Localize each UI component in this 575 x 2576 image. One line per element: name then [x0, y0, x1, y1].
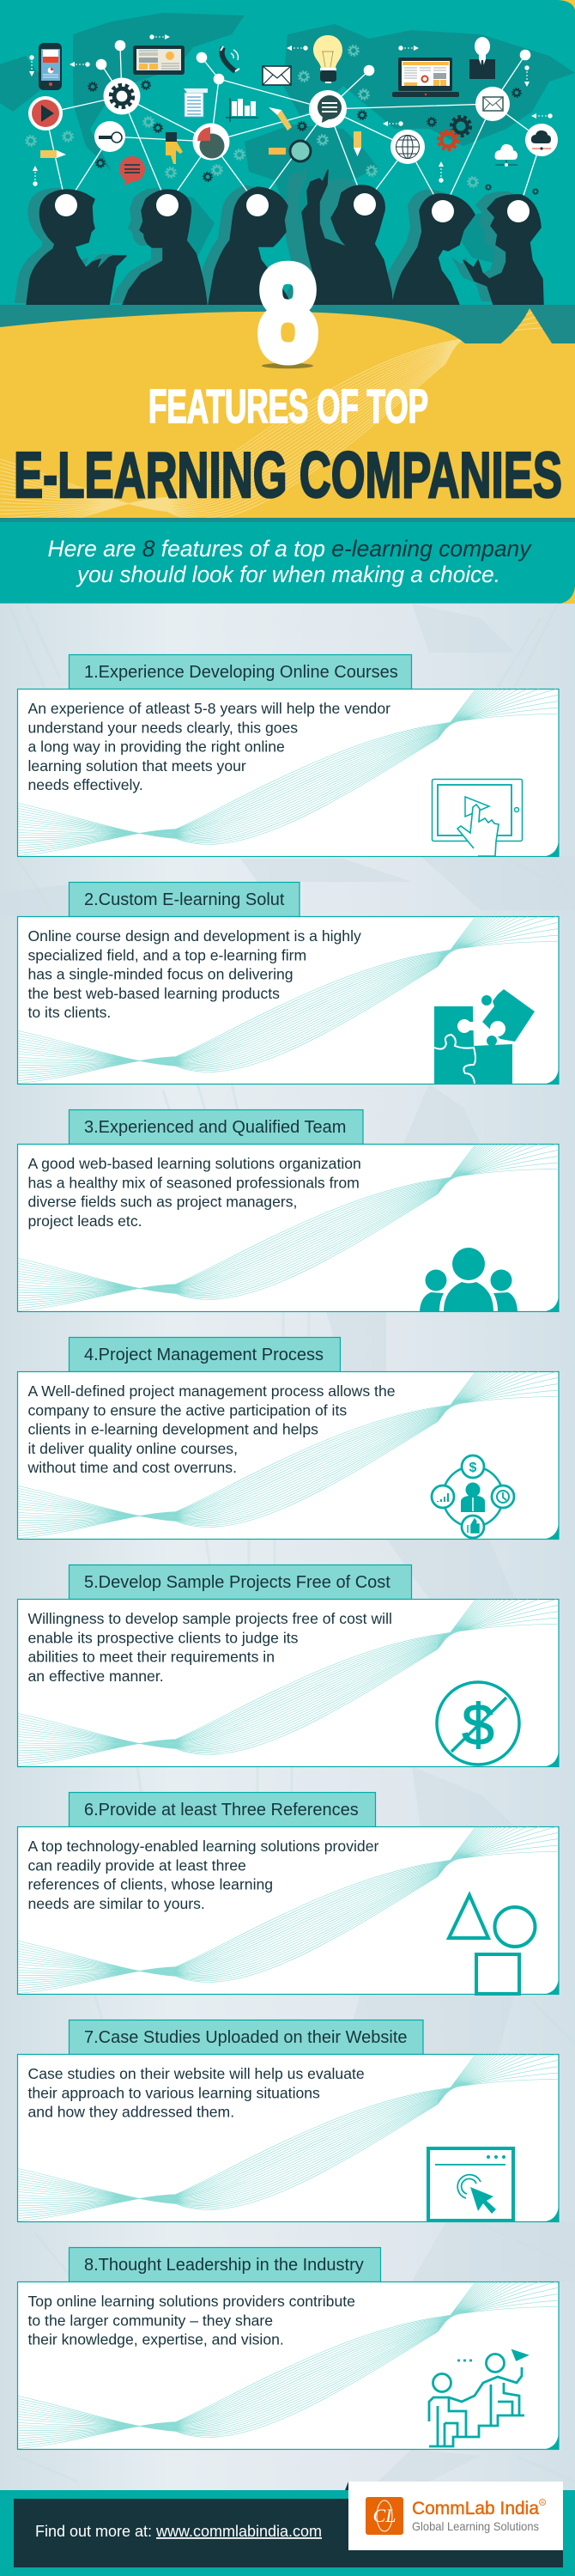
- icon: project management cycle: [432, 1455, 514, 1538]
- text: feature 7 body: their approach to various learning situations: [27, 2084, 320, 2101]
- text: feature 8 body: Top online learning solutions providers contribute: [27, 2293, 355, 2310]
- text: feature 3 body: A good web-based learning solutions organization: [27, 1155, 361, 1172]
- icon: no cost: [437, 1682, 519, 1765]
- panel: feature 4: [17, 1336, 560, 1540]
- text: feature 4 body: [27, 1382, 396, 1476]
- text: feature 7 body: and how they addressed them.: [27, 2104, 234, 2121]
- text: feature 6 body: can readily provide at least three: [27, 1856, 246, 1874]
- heading: features of top: FEATURES OF TOP: [148, 380, 428, 433]
- text: feature 5 body: Willingness to develop sample projects free of cost will: [27, 1610, 392, 1627]
- icon: document: [184, 88, 208, 117]
- text: feature 1 body: [27, 700, 390, 793]
- text: feature 3 body: has a healthy mix of seasoned professionals from: [27, 1174, 360, 1191]
- heading: feature 2: 2.Custom E-learning Solut: [84, 890, 285, 909]
- icon: shapes: [449, 1895, 536, 1994]
- icon: pencil: [269, 107, 292, 131]
- text: feature 1 body: needs effectively.: [27, 776, 143, 793]
- dashed arrows: [32, 37, 550, 184]
- people shadows: [15, 163, 531, 303]
- text: intro line 2: you should look for when making a choice.: [76, 562, 500, 587]
- heading: feature 4: [69, 1338, 340, 1372]
- heading: feature 6: [69, 1793, 376, 1827]
- panel: yellow title band: [0, 305, 575, 522]
- icon: bar chart: [226, 98, 258, 122]
- icon: project management cycle: $: [469, 1461, 477, 1475]
- text: feature 1 body: understand your needs clearly, this goes: [27, 719, 298, 736]
- world map backdrop: [0, 13, 575, 266]
- icon: laptop: [392, 58, 459, 97]
- text: feature 4 body: it deliver quality online courses,: [27, 1440, 238, 1457]
- heading: feature 1: [69, 654, 412, 689]
- icon: no cost: $: [462, 1692, 494, 1758]
- heading: feature 7: [69, 2020, 423, 2054]
- small gears: [26, 46, 478, 187]
- heading: feature 5: [69, 1564, 412, 1599]
- text: feature 1 body: An experience of atleast 5-8 years will help the vendor: [27, 700, 390, 717]
- text: feature 3 body: [27, 1155, 361, 1230]
- heading: feature 8: 8.Thought Leadership in the Industry: [84, 2256, 364, 2275]
- heading: feature 5: 5.Develop Sample Projects Free of Cost: [84, 1573, 390, 1592]
- text: feature 2 body: has a single-minded focus on delivering: [27, 966, 294, 983]
- text: feature 1 body: learning solution that meets your: [27, 757, 246, 775]
- node: globe: [390, 130, 425, 164]
- heading: feature 2: [69, 883, 300, 917]
- text: feature 2 body: the best web-based learning products: [27, 985, 280, 1002]
- silhouettes of people: [27, 170, 543, 305]
- icon: red chat bubble: [119, 156, 145, 185]
- text: feature 8 body: [27, 2293, 355, 2348]
- heading: feature 7: 7.Case Studies Uploaded on their Website: [84, 2028, 408, 2047]
- logo: CommLab India: Global Learning Solutions: [412, 2519, 539, 2533]
- icon: puzzle: [434, 989, 535, 1084]
- icon: pointing hand: [166, 132, 183, 164]
- icon: businessman: [469, 37, 495, 79]
- panel: intro banner: [0, 522, 575, 604]
- panel: feature 6: [17, 1791, 560, 1996]
- text: feature 2 body: [27, 927, 361, 1021]
- panel: feature 5: [17, 1564, 560, 1767]
- heading: big 8: 8: [258, 239, 318, 387]
- text: feature 6 body: references of clients, whose learning: [27, 1876, 273, 1893]
- text: find out more: Find out more at: www.commlabindia.com: [35, 2523, 322, 2540]
- heading: feature 1: 1.Experience Developing Online Courses: [84, 663, 398, 682]
- text: feature 4 body: clients in e-learning development and helps: [27, 1421, 318, 1438]
- icon: web click: [428, 2148, 513, 2221]
- node: cloud: [525, 124, 558, 156]
- text: feature 4 body: A Well-defined project management process allows the: [27, 1382, 396, 1400]
- head and small nodes: [55, 40, 530, 222]
- panel: header illustration: [0, 0, 575, 309]
- icon: tablet: [133, 46, 185, 75]
- icon: pencil left: [40, 150, 66, 158]
- icon: team: [420, 1248, 518, 1311]
- icon: leadership climb: [429, 2351, 526, 2446]
- node: pie chart: [192, 124, 230, 160]
- text: feature 1 body: a long way in providing the right online: [27, 738, 285, 756]
- icon: white cloud: [494, 144, 518, 167]
- text: feature 2 body: Online course design and development is a highly: [27, 927, 361, 945]
- heading: feature 8: [69, 2248, 381, 2282]
- text: feature 3 body: project leads etc.: [27, 1212, 142, 1230]
- heading: feature 6: 6.Provide at least Three References: [84, 1801, 359, 1820]
- text: feature 2 body: to its clients.: [27, 1004, 111, 1021]
- text: feature 6 body: [27, 1838, 378, 1912]
- node: play: [28, 96, 63, 131]
- panel: footer: [0, 2482, 575, 2576]
- panel: feature 8: [17, 2246, 560, 2451]
- logo: CommLab India: CommLab India: [412, 2499, 539, 2518]
- node: mail: [475, 87, 510, 121]
- panel: feature 1: [17, 654, 560, 857]
- text: intro line 1: Here are 8 features of a top e-learning company: [48, 536, 532, 562]
- icon: magnifier: [269, 141, 311, 161]
- text: feature 6 body: A top technology-enabled learning solutions provider: [27, 1838, 378, 1855]
- network lines: [45, 46, 542, 211]
- heading: feature 3: 3.Experienced and Qualified Team: [84, 1118, 346, 1137]
- text: feature 7 body: [27, 2065, 365, 2121]
- logo: CommLab India: R: [541, 2500, 544, 2506]
- logo: CommLab India: CL: [373, 2505, 396, 2526]
- text: feature 4 body: company to ensure the active participation of its: [27, 1401, 347, 1419]
- text: feature 6 body: needs are similar to yours.: [27, 1895, 205, 1912]
- icon: phone: [39, 43, 62, 90]
- text: feature 2 body: specialized field, and a top e-learning firm: [27, 946, 306, 963]
- panel: feature 3: [17, 1109, 560, 1312]
- icon: tablet touch: [433, 780, 522, 856]
- text: feature 5 body: enable its prospective clients to judge its: [27, 1629, 299, 1646]
- icon: light bulb: [313, 35, 342, 83]
- text: feature 5 body: an effective manner.: [27, 1668, 164, 1685]
- text: feature 8 body: to the larger community – they share: [27, 2312, 273, 2329]
- logo: CommLab India: [348, 2482, 563, 2550]
- text: feature 5 body: [27, 1610, 392, 1685]
- text: feature 5 body: abilities to meet their requirements in: [27, 1649, 275, 1666]
- heading: feature 3: [69, 1109, 363, 1144]
- text: feature 7 body: Case studies on their website will help us evaluate: [27, 2065, 365, 2082]
- icon: mail: [263, 66, 291, 85]
- text: feature 3 body: diverse fields such as project managers,: [27, 1194, 297, 1211]
- node: chat: [309, 90, 347, 128]
- panel: feature 7: [17, 2020, 560, 2222]
- node: search: [94, 121, 125, 152]
- panel: feature 2: [17, 881, 560, 1085]
- text: feature 4 body: without time and cost overruns.: [27, 1459, 237, 1476]
- panel: page background: [0, 604, 575, 2490]
- heading: feature 4: 4.Project Management Process: [84, 1346, 324, 1364]
- icon: vertical pencil: [354, 131, 361, 156]
- icon: handset: [221, 46, 239, 71]
- text: feature 8 body: their knowledge, expertise, and vision.: [27, 2331, 284, 2348]
- node: gear: [103, 77, 141, 115]
